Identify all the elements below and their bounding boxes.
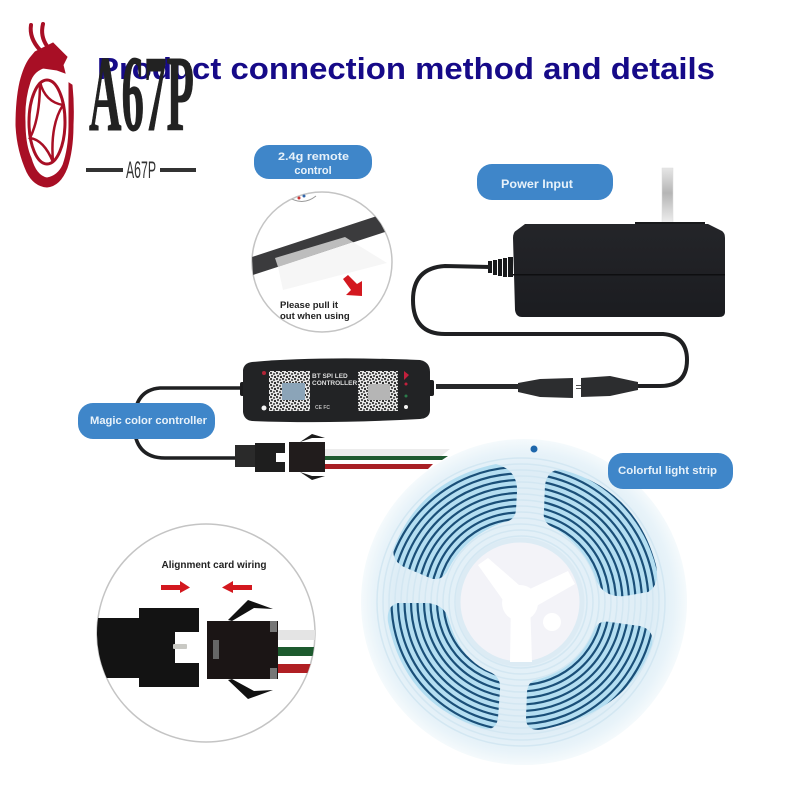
DC connectors bbox=[436, 376, 638, 398]
inset: remote pull tab bbox=[252, 192, 392, 332]
QR code left bbox=[269, 371, 310, 411]
label: magic color controller bbox=[78, 403, 215, 439]
hub blades bbox=[478, 558, 575, 662]
power adapter bbox=[488, 168, 725, 317]
label: magic color controller: Magic color controller bbox=[90, 415, 208, 427]
label: 2.4g remote control: control bbox=[294, 165, 332, 177]
infographic canvas: A67P bbox=[89, 35, 194, 154]
logo sub-mark: A67P bbox=[126, 157, 156, 184]
cable: adapter to DC connector bbox=[413, 266, 687, 386]
controller: CONTROLLER bbox=[312, 380, 357, 387]
label: 2.4g remote control bbox=[254, 145, 372, 179]
inset: remote pull tab: Please pull it bbox=[280, 300, 339, 311]
LED strip reel bbox=[361, 439, 687, 765]
cable: controller to SM connector bbox=[134, 388, 245, 458]
inset: alignment card wiring bbox=[90, 524, 319, 742]
black plug bbox=[90, 608, 199, 687]
reel hub bbox=[458, 540, 582, 664]
socket body bbox=[207, 621, 278, 679]
controller bbox=[240, 358, 434, 422]
logo: red dragon coin bbox=[16, 24, 73, 187]
label: power input: Power Input bbox=[501, 177, 573, 191]
SM connector with wires bbox=[235, 434, 450, 480]
strain relief bbox=[488, 257, 513, 277]
title: Product connection method and details bbox=[97, 51, 715, 86]
icon: red arrow left bbox=[222, 581, 252, 593]
wires bbox=[278, 630, 315, 640]
logo sub-mark bbox=[86, 157, 196, 184]
label: power input bbox=[477, 164, 613, 200]
controller label: BT SPI LED bbox=[312, 373, 348, 380]
label: colorful light strip: Colorful light strip bbox=[618, 465, 717, 477]
label: colorful light strip bbox=[608, 453, 733, 489]
QR code right bbox=[358, 371, 398, 411]
icon: red arrow right bbox=[161, 581, 190, 593]
LED strip windings bbox=[388, 464, 657, 730]
controller: CE FC bbox=[315, 405, 330, 411]
inset: remote pull tab: out when using bbox=[280, 311, 350, 322]
icon: red pull arrow bbox=[343, 275, 362, 296]
label: 2.4g remote control: 2.4g remote bbox=[278, 151, 349, 163]
inset: alignment card wiring: Alignment card wiring bbox=[161, 560, 267, 571]
